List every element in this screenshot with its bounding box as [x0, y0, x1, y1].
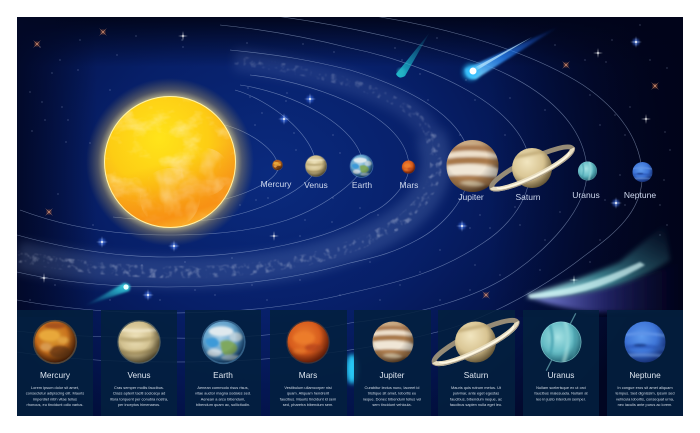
text: Mars: Vestibulum ullamcorper nisi	[284, 385, 332, 390]
text: Jupiter: Curabitur lectus nunc, laoreet id	[365, 385, 419, 390]
text: Jupiter: tristique sit amet, lobortis eu	[368, 391, 416, 396]
comet: blue top	[463, 26, 560, 80]
card: Mercury	[17, 310, 93, 416]
text: Neptune: nec iaculis ante purus ac lorem.	[618, 402, 672, 407]
text: Mercury: consectetur adipiscing elit. Mauris	[26, 391, 84, 396]
planet: Venus	[305, 155, 327, 177]
text: Uranus: Nullam scelerisque ex ut orci	[536, 385, 586, 390]
label: Mercury: Mercury	[261, 179, 292, 189]
starfield	[30, 25, 670, 301]
icon: Earth	[201, 320, 246, 364]
text: Jupiter: neque. Donec bibendum tellus vel	[363, 396, 421, 401]
text: Neptune: In congue eros sit amet aliquam	[617, 385, 673, 390]
text: Uranus: faucibus malesuada. Nullam at	[534, 391, 589, 396]
label: Mars: Mars	[400, 180, 418, 190]
text: Earth: bibendum quam ac, sollicitudin.	[196, 402, 250, 407]
text: Uranus: leo in justo interdum semper.	[536, 396, 586, 401]
comet glow between cards	[346, 354, 358, 384]
icon: Mercury	[33, 320, 77, 364]
card: Venus	[101, 310, 177, 416]
heading: Venus: Venus	[127, 370, 151, 380]
comet: bottom left	[90, 282, 132, 304]
card: Mars	[270, 310, 347, 416]
text: Mars: faucibus. Mauris tincidunt id sem	[280, 396, 336, 401]
icon: Mars	[286, 320, 330, 364]
text: Saturn: faucibus, bibendum neque, ac	[450, 396, 502, 401]
icon: Saturn	[430, 314, 524, 373]
heading: Saturn: Saturn	[464, 370, 489, 380]
text: Venus: per inceptos himenaeos.	[118, 402, 160, 407]
text: Earth: vitae auctor magna sodales sed.	[195, 391, 251, 396]
planet: Uranus	[578, 162, 597, 180]
heading: Earth: Earth	[213, 370, 233, 380]
text: Mars: sed, pharetra bibendum sem.	[283, 402, 333, 407]
text: Mercury: imperdiet nibh vitae tellus	[33, 396, 77, 401]
label: Uranus: Uranus	[572, 190, 600, 200]
text: Mercury: rhoncus, eu tincidunt odio varius.	[27, 402, 83, 407]
heading: Neptune: Neptune	[629, 370, 661, 380]
label: Earth: Earth	[352, 180, 372, 190]
heading: Mars: Mars	[299, 370, 317, 380]
planet: Jupiter	[446, 140, 498, 192]
text: Neptune: tempus. Sed dignissim, ipsum sed	[615, 391, 675, 396]
comet: large lower right	[528, 225, 680, 312]
heading: Jupiter: Jupiter	[380, 370, 405, 380]
card: Saturn	[430, 310, 524, 416]
label: Jupiter: Jupiter	[458, 192, 484, 202]
text: Saturn: Mauris quis rutrum metus. Ut	[451, 385, 502, 390]
card: Uranus	[523, 310, 599, 416]
comet: teal top	[396, 35, 428, 78]
nebula dust band	[17, 60, 436, 272]
text: Mars: quam. Aliquam hendrerit	[287, 391, 330, 396]
icon: Jupiter	[372, 322, 414, 362]
card: Jupiter	[354, 310, 431, 416]
text: Venus: litora torquent per conubia nostra,	[110, 396, 168, 401]
icon: Venus	[117, 320, 161, 364]
orbits	[17, 10, 642, 362]
card: Earth	[185, 310, 261, 416]
sun	[86, 78, 254, 246]
text: Venus: Class aptent taciti sociosqu ad	[113, 391, 165, 396]
planet: Neptune	[632, 162, 652, 182]
heading: Uranus: Uranus	[548, 370, 574, 380]
label: Neptune: Neptune	[624, 190, 656, 200]
text: Neptune: vehicula lobortis, consequat urna,	[616, 396, 674, 401]
text: Jupiter: sem tincidunt vehicula.	[372, 402, 412, 407]
label: Saturn: Saturn	[515, 192, 541, 202]
text: Venus: Cras semper mollis faucibus.	[114, 385, 164, 390]
text: Saturn: faucibus sapien nulla eget leo.	[450, 402, 502, 407]
planet: Saturn	[489, 144, 576, 192]
icon: Uranus	[540, 313, 582, 371]
heading: Mercury: Mercury	[40, 370, 71, 380]
text: Earth: Aenean a arcu bibendum,	[201, 396, 245, 401]
card: Neptune	[607, 310, 683, 416]
text: Mercury: Lorem ipsum dolor sit amet,	[31, 385, 79, 390]
text: Saturn: pulvinar, ante eget egestas	[453, 391, 499, 396]
planet: Earth	[350, 154, 373, 178]
planet: Mercury	[272, 160, 283, 170]
icon: Neptune	[624, 322, 666, 362]
planet: Mars	[402, 160, 415, 174]
label: Venus: Venus	[304, 180, 328, 190]
text: Earth: Aenean commodo risus risus,	[197, 385, 249, 390]
